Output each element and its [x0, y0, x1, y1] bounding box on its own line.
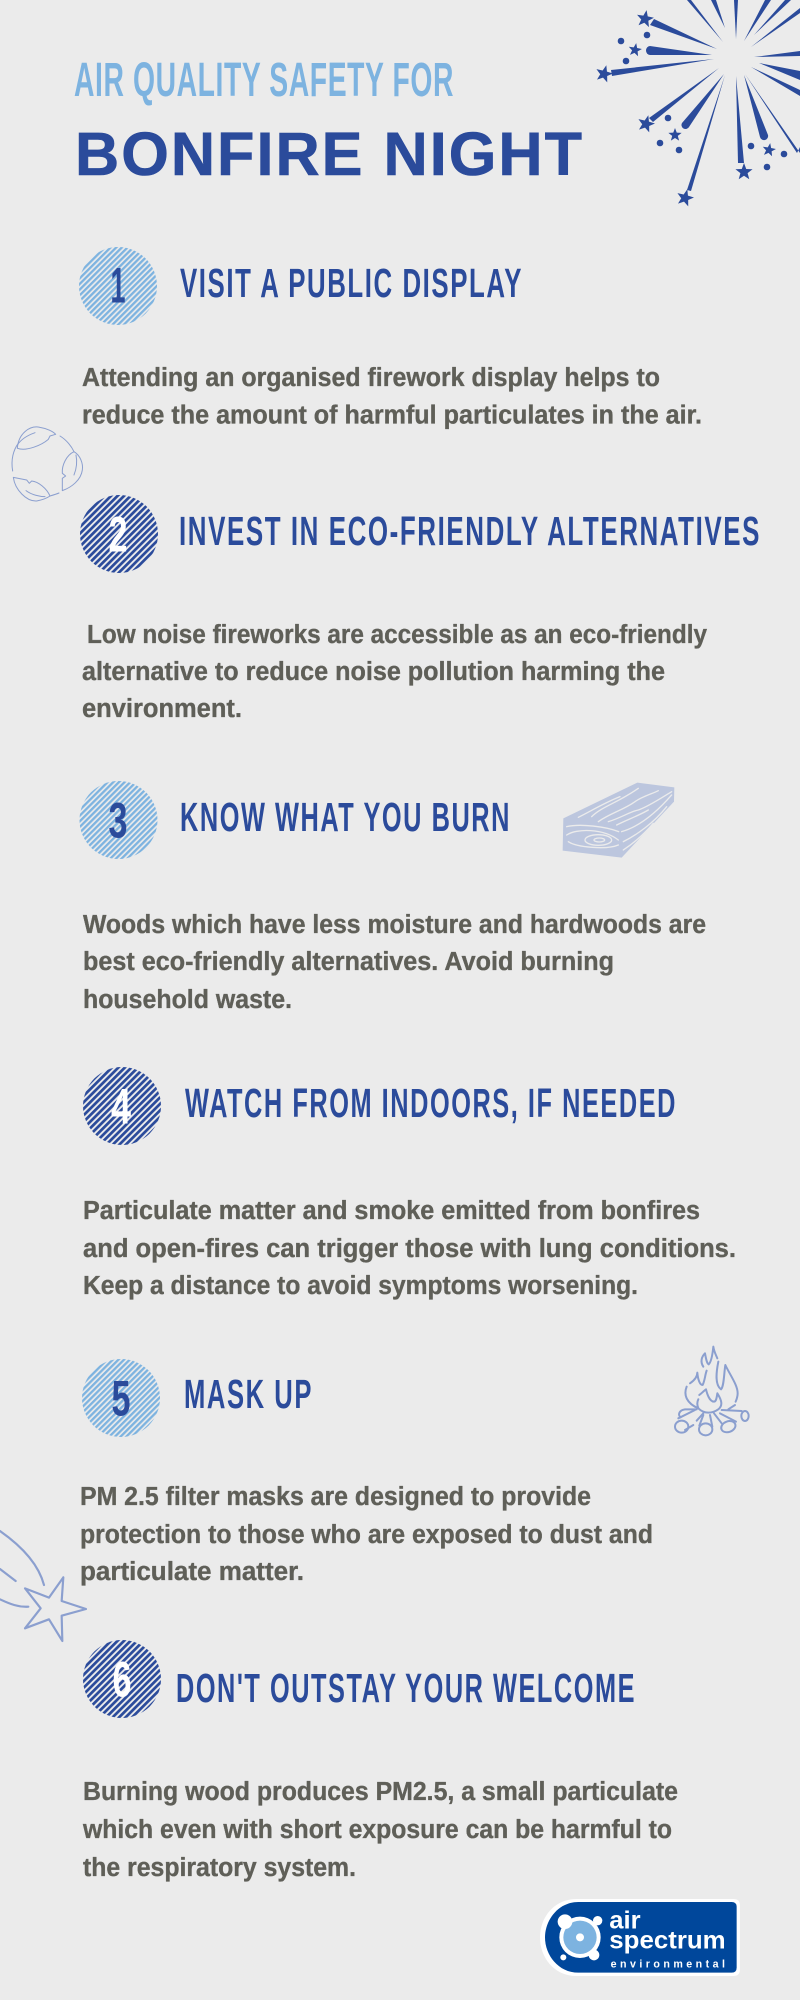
logo wordmark: air [609, 1906, 641, 1934]
badge 1: 1 [110, 258, 126, 314]
body text 6: which even with short exposure can be harmful to [82, 1816, 672, 1844]
badge 4: 4 [111, 1078, 131, 1134]
body text 5: PM 2.5 filter masks are designed to provide [80, 1483, 591, 1511]
body text 4: and open-fires can trigger those with lung conditions. [83, 1235, 736, 1263]
badge 2 [80, 495, 158, 573]
logo mark [558, 1914, 602, 1960]
body text 2: environment. [82, 695, 242, 723]
heading 1: VISIT A PUBLIC DISPLAY [180, 260, 523, 306]
body text 2: Low noise fireworks are accessible as an eco-friendly [87, 621, 708, 649]
body text 2: alternative to reduce noise pollution harming the [82, 658, 665, 686]
step 1 panel [79, 247, 702, 430]
body text 3: best eco-friendly alternatives. Avoid burning [83, 948, 614, 976]
icon: wood log [563, 783, 674, 858]
title [74, 54, 584, 188]
icon: shooting star [0, 1531, 86, 1641]
body text 4: Keep a distance to avoid symptoms worsening. [83, 1272, 638, 1300]
icon: fireworks burst [594, 0, 800, 207]
title line 2: BONFIRE NIGHT [75, 120, 584, 188]
body text 6: Burning wood produces PM2.5, a small particulate [83, 1778, 678, 1806]
step 3 panel [80, 781, 706, 1014]
logo wordmark [609, 1906, 726, 1970]
badge 3: 3 [108, 792, 128, 848]
body text 5: protection to those who are exposed to dust and [80, 1521, 653, 1549]
heading 5: MASK UP [184, 1371, 313, 1417]
step 6 panel [82, 1640, 678, 1882]
badge 5 [82, 1359, 160, 1437]
logo: air spectrum environmental [540, 1899, 740, 1976]
body text 1: reduce the amount of harmful particulates in the air. [82, 402, 702, 430]
badge 2: 2 [108, 506, 128, 562]
badge 5: 5 [112, 1370, 130, 1426]
step 4 panel [83, 1067, 736, 1300]
body text 1: Attending an organised firework display helps to [82, 364, 660, 392]
body text 6: the respiratory system. [83, 1854, 356, 1882]
body text 3: household waste. [83, 986, 292, 1014]
body text 3: Woods which have less moisture and hardwoods are [83, 911, 706, 939]
badge 4 [83, 1067, 161, 1145]
badge 1 [79, 247, 157, 325]
logo wordmark: spectrum [609, 1926, 726, 1954]
logo wordmark: environmental [611, 1958, 725, 1970]
badge 3 [80, 781, 158, 859]
body text 4: Particulate matter and smoke emitted from bonfires [83, 1197, 700, 1225]
step 2 panel [80, 495, 761, 723]
heading 3: KNOW WHAT YOU BURN [180, 794, 511, 840]
body text 5: particulate matter. [80, 1558, 304, 1586]
badge 6: 6 [112, 1652, 132, 1708]
badge 6 [83, 1640, 161, 1718]
title line 1: AIR QUALITY SAFETY FOR [74, 54, 454, 107]
icon: campfire [675, 1347, 749, 1435]
step 5 panel [80, 1359, 653, 1586]
icon: recycling leaves [12, 427, 83, 501]
